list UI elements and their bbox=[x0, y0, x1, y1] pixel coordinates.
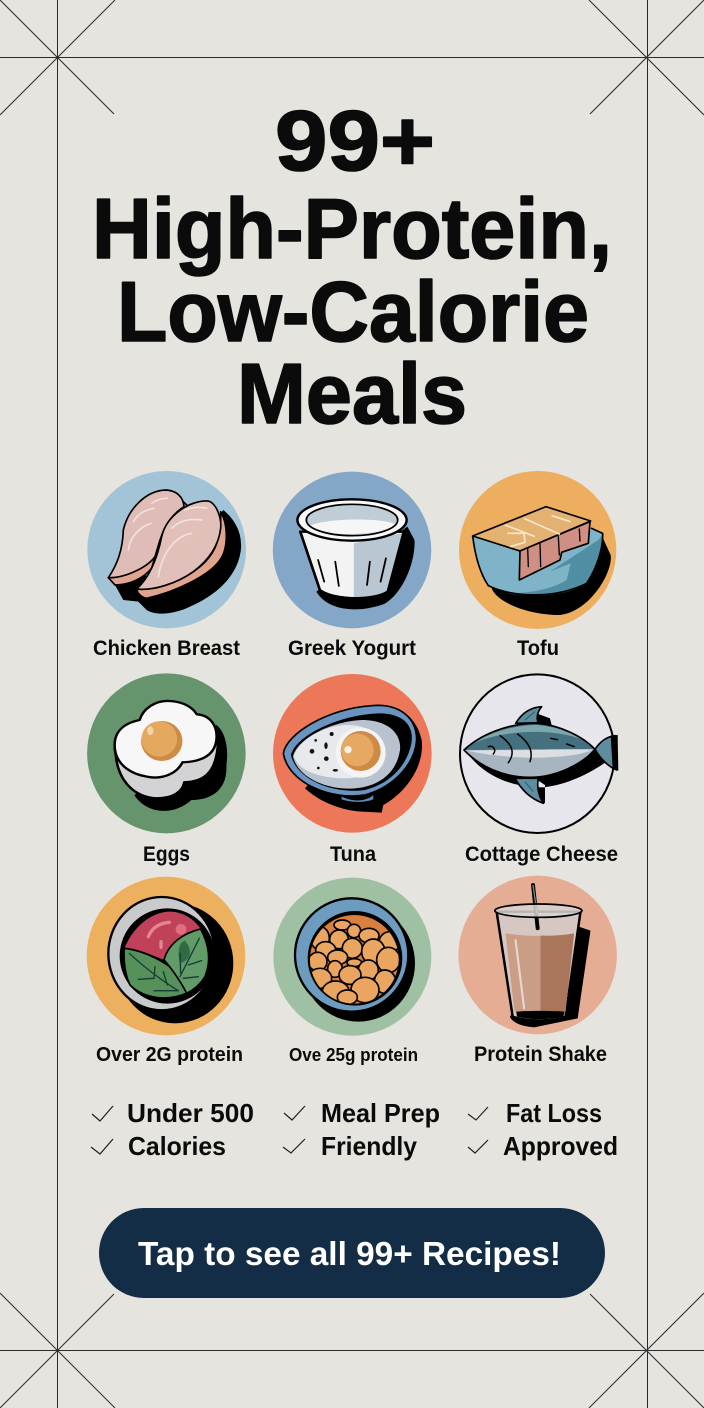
benefit: Fat Loss Approved: Fat Loss bbox=[506, 1098, 602, 1128]
title: Low-Calorie bbox=[117, 265, 589, 360]
icon: fried egg bbox=[87, 673, 246, 833]
benefit: Under 500 Calories: Under 500 bbox=[127, 1098, 254, 1128]
label: Tuna: Tuna bbox=[330, 843, 376, 866]
icon: tuna dish bbox=[273, 674, 432, 833]
call-to-action button bbox=[99, 1208, 605, 1298]
icon: fish bbox=[460, 674, 618, 833]
icon: chickpeas bowl bbox=[273, 878, 431, 1036]
benefit: Under 500 Calories: Calories bbox=[128, 1131, 226, 1161]
benefit: Meal Prep Friendly bbox=[283, 1098, 440, 1161]
benefit: Meal Prep Friendly: Meal Prep bbox=[321, 1098, 440, 1128]
benefit: Under 500 Calories bbox=[91, 1098, 254, 1161]
label: Ove 25g protein: Ove 25g protein bbox=[289, 1045, 418, 1065]
icon: tofu in bowl bbox=[459, 471, 616, 629]
title: Meals bbox=[237, 347, 467, 442]
label: Protein Shake: Protein Shake bbox=[474, 1043, 607, 1066]
label: Over 2G protein: Over 2G protein bbox=[96, 1044, 243, 1066]
label: Eggs: Eggs bbox=[143, 843, 190, 866]
benefit: Meal Prep Friendly: Friendly bbox=[321, 1131, 418, 1161]
icon: chicken breast bbox=[87, 471, 246, 628]
title: 99+ bbox=[275, 94, 435, 189]
benefit: Fat Loss Approved bbox=[468, 1098, 618, 1161]
icon: greek yogurt cup bbox=[273, 472, 431, 628]
title bbox=[92, 94, 612, 442]
call-to-action button: Tap to see all 99+ Recipes! bbox=[138, 1235, 561, 1272]
benefit: Fat Loss Approved: Approved bbox=[503, 1131, 618, 1161]
label: Cottage Cheese: Cottage Cheese bbox=[465, 843, 618, 866]
label: Greek Yogurt: Greek Yogurt bbox=[288, 637, 416, 660]
icon: bowl with leaves bbox=[87, 877, 245, 1035]
label: Tofu: Tofu bbox=[517, 637, 559, 660]
label: Chicken Breast: Chicken Breast bbox=[93, 637, 240, 660]
title: High-Protein, bbox=[92, 182, 612, 277]
icon: protein shake bbox=[458, 876, 617, 1034]
